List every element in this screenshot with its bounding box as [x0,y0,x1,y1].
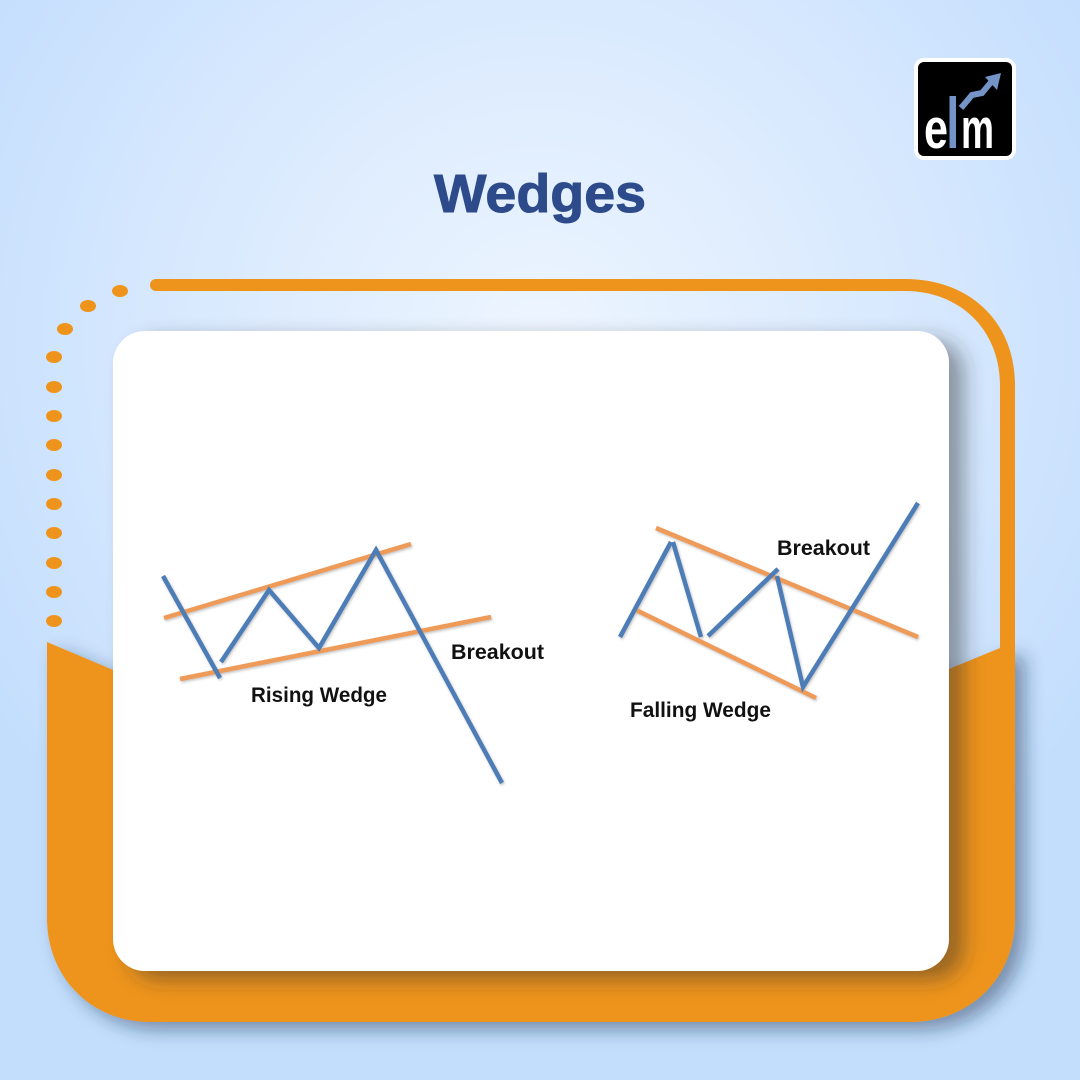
panel: white card [113,331,949,971]
falling wedge third swing [708,569,778,636]
logo arrow [961,73,1001,108]
label: falling wedge breakout: Breakout [777,537,870,560]
falling wedge breakout line [777,503,918,687]
label: falling wedge: Falling Wedge [630,699,771,722]
title: Wedges [434,164,646,224]
label: rising wedge breakout: Breakout [451,641,544,664]
logo letter m: m [961,97,994,161]
logo [914,58,1016,161]
logo bar l [950,96,956,148]
rising wedge upper trendline [164,544,411,618]
falling wedge lower trendline [634,609,816,698]
falling wedge first swing [620,542,671,637]
chart: falling wedge [620,503,918,698]
logo letter e: e [924,97,948,161]
rising wedge entry line [163,576,220,678]
rising wedge price line [221,550,502,783]
orange base shape [47,642,1015,1022]
falling wedge second swing [673,542,701,637]
label: rising wedge: Rising Wedge [251,684,387,707]
orange frame line [150,279,1015,660]
chart: rising wedge [163,544,502,783]
dotted arc [46,285,128,627]
falling wedge upper trendline [656,528,918,637]
rising wedge lower trendline [180,617,491,679]
